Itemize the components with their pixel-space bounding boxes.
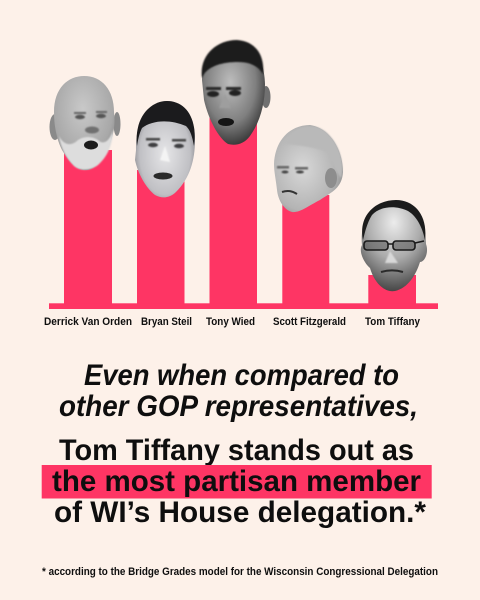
icon: Scott Fitzgerald head [274,125,343,212]
icon: Tony Wied head [202,40,270,145]
bar: Bryan Steil [137,170,184,305]
footnote: * according to the Bridge Grades model for the Wisconsin Congressional Delegation [42,566,438,578]
icon: Derrick Van Orden head [50,76,120,170]
bar: Tony Wied [210,115,257,305]
bar: Derrick Van Orden [64,150,112,305]
heading: italic lead-in: other GOP representatives, [59,390,418,423]
heading: main statement [42,434,432,529]
bar: Scott Fitzgerald [282,195,329,305]
heading: main statement: the most partisan member [52,465,422,498]
bar: Tom Tiffany [368,275,416,305]
heading: main statement: Tom Tiffany stands out as [59,434,414,467]
highlight band [42,465,432,498]
heading: italic lead-in: Even when compared to [84,359,399,392]
label: Bryan Steil: Bryan Steil [141,316,192,328]
label: Tony Wied: Tony Wied [206,316,255,328]
bar chart [49,115,438,309]
heading: italic lead-in [59,359,418,423]
label: Derrick Van Orden: Derrick Van Orden [44,316,132,328]
label: Scott Fitzgerald: Scott Fitzgerald [273,316,346,328]
chart baseline [49,303,438,309]
icon: Tom Tiffany head [361,200,427,291]
heading: main statement: of WI’s House delegation.* [54,496,427,529]
icon: Bryan Steil head [135,101,195,197]
label: Tom Tiffany: Tom Tiffany [365,316,421,328]
name labels [44,316,421,328]
